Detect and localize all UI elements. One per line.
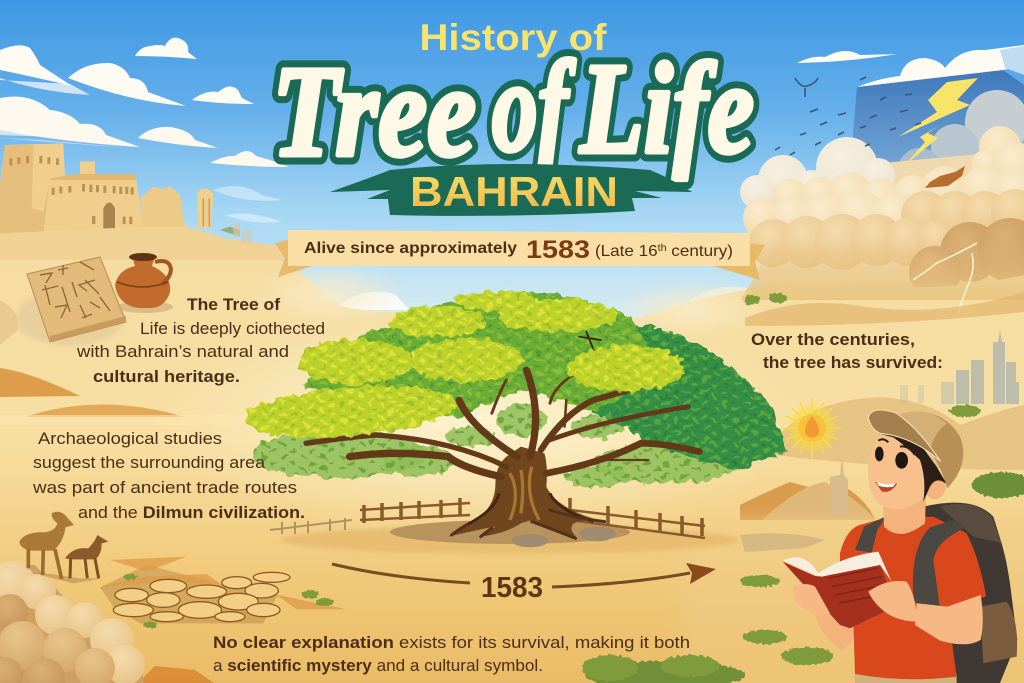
person with book and backpack xyxy=(783,410,1017,683)
wooden fence right xyxy=(570,498,705,538)
goats xyxy=(19,512,108,583)
ground mound under the tree xyxy=(280,520,740,554)
clouds xyxy=(0,38,1024,325)
title: History of: History of xyxy=(420,17,607,58)
pale glow behind tree xyxy=(150,300,810,540)
title group xyxy=(272,17,754,216)
wooden fence left xyxy=(270,498,470,534)
ground lightning xyxy=(913,243,977,313)
icon: sun with flame xyxy=(782,398,842,458)
tree canopy back layer xyxy=(303,293,786,470)
text block: over the centuries: Over the centuries, xyxy=(751,330,915,349)
dust storm clouds xyxy=(740,90,1024,298)
distant tower xyxy=(830,458,848,515)
title: Tree of Life outline: Tree xyxy=(272,40,476,184)
flock of birds xyxy=(775,77,921,155)
hands xyxy=(793,581,917,622)
title: Tree of Life outline xyxy=(272,35,754,184)
ribbon: alive since: 1583 xyxy=(526,236,590,264)
far arm xyxy=(815,610,855,651)
text block: over the centuries: the tree has survived: xyxy=(763,353,943,372)
ribbon: alive since: (Late 16 xyxy=(595,243,654,260)
near arm xyxy=(915,595,983,644)
icon: clay jug xyxy=(115,253,173,313)
neck xyxy=(883,497,926,534)
text block: archaeological studies: and the Dilmun civilization. xyxy=(78,503,305,522)
ribbon: alive since: century) xyxy=(667,243,733,260)
text block: tree of life heritage: Life is deeply ciothected xyxy=(140,319,325,338)
sky background xyxy=(0,0,1024,340)
title: Tree of Life outline: of xyxy=(492,35,576,179)
ribbon: alive since xyxy=(275,230,765,280)
dunes right xyxy=(138,292,1024,683)
dunes left xyxy=(0,300,320,425)
title: Tree of Life fill: Life xyxy=(579,37,754,181)
tree roots detail xyxy=(452,510,605,538)
title: Tree of Life fill xyxy=(272,35,754,184)
rocks at tree base xyxy=(512,527,615,547)
title: Tree of Life fill: of xyxy=(492,35,576,179)
text block: archaeological studies: suggest the surrounding area xyxy=(33,453,266,472)
left dust cloud bottom xyxy=(0,561,145,683)
backpack straps xyxy=(855,516,967,608)
storm sky top right xyxy=(850,70,1024,175)
soft sand edge right of tree xyxy=(610,280,770,340)
text block: survival mystery: No clear explanation exists for its survival, making it both xyxy=(213,633,690,652)
title: Bahrain: BAHRAIN xyxy=(410,168,618,215)
text block: over the centuries xyxy=(751,330,943,372)
text block: archaeological studies: Archaeological studies xyxy=(38,429,222,448)
legs xyxy=(855,673,957,683)
timeline arrow with year: 1583 xyxy=(481,572,543,604)
text block: tree of life heritage: with Bahrain’s natural and xyxy=(76,342,289,361)
text block: tree of life heritage: The Tree of xyxy=(187,295,280,314)
tree trunk and branches xyxy=(306,332,699,538)
icon: clay tablet with inscriptions xyxy=(15,257,126,346)
ribbon: alive since: th xyxy=(658,243,667,254)
distant city skyline xyxy=(900,330,1019,404)
cracked earth xyxy=(100,557,347,623)
title: Tree of Life outline: Life xyxy=(579,37,754,181)
text block: tree of life heritage: cultural heritage. xyxy=(93,367,240,386)
title: Tree of Life fill: Tree xyxy=(272,40,476,184)
text block: survival mystery xyxy=(213,633,690,675)
open red book xyxy=(783,552,895,628)
soft sand edge left of tree xyxy=(250,261,410,329)
red shirt xyxy=(840,517,986,679)
text block: survival mystery: a scientific mystery and a cultural symbol. xyxy=(213,656,543,675)
ancient fort ruins xyxy=(0,143,283,260)
cap xyxy=(868,410,963,488)
head xyxy=(868,426,947,509)
title banner shape xyxy=(330,164,692,216)
desert shrubs xyxy=(123,293,1024,683)
lightning bolts xyxy=(898,78,978,165)
tree lower pale foliage xyxy=(252,403,739,487)
tree xyxy=(241,291,786,547)
text block: tree of life heritage xyxy=(76,295,325,386)
desert ground xyxy=(0,236,1024,683)
text block: archaeological studies: was part of ancient trade routes xyxy=(32,478,297,497)
timeline arrow with year xyxy=(332,563,716,604)
backpack xyxy=(923,503,1017,683)
tree foliage highlights xyxy=(241,291,685,444)
dust fade into ground xyxy=(740,238,1024,300)
ribbon: alive since: Alive since approximately xyxy=(304,240,517,257)
text block: archaeological studies xyxy=(32,429,305,522)
